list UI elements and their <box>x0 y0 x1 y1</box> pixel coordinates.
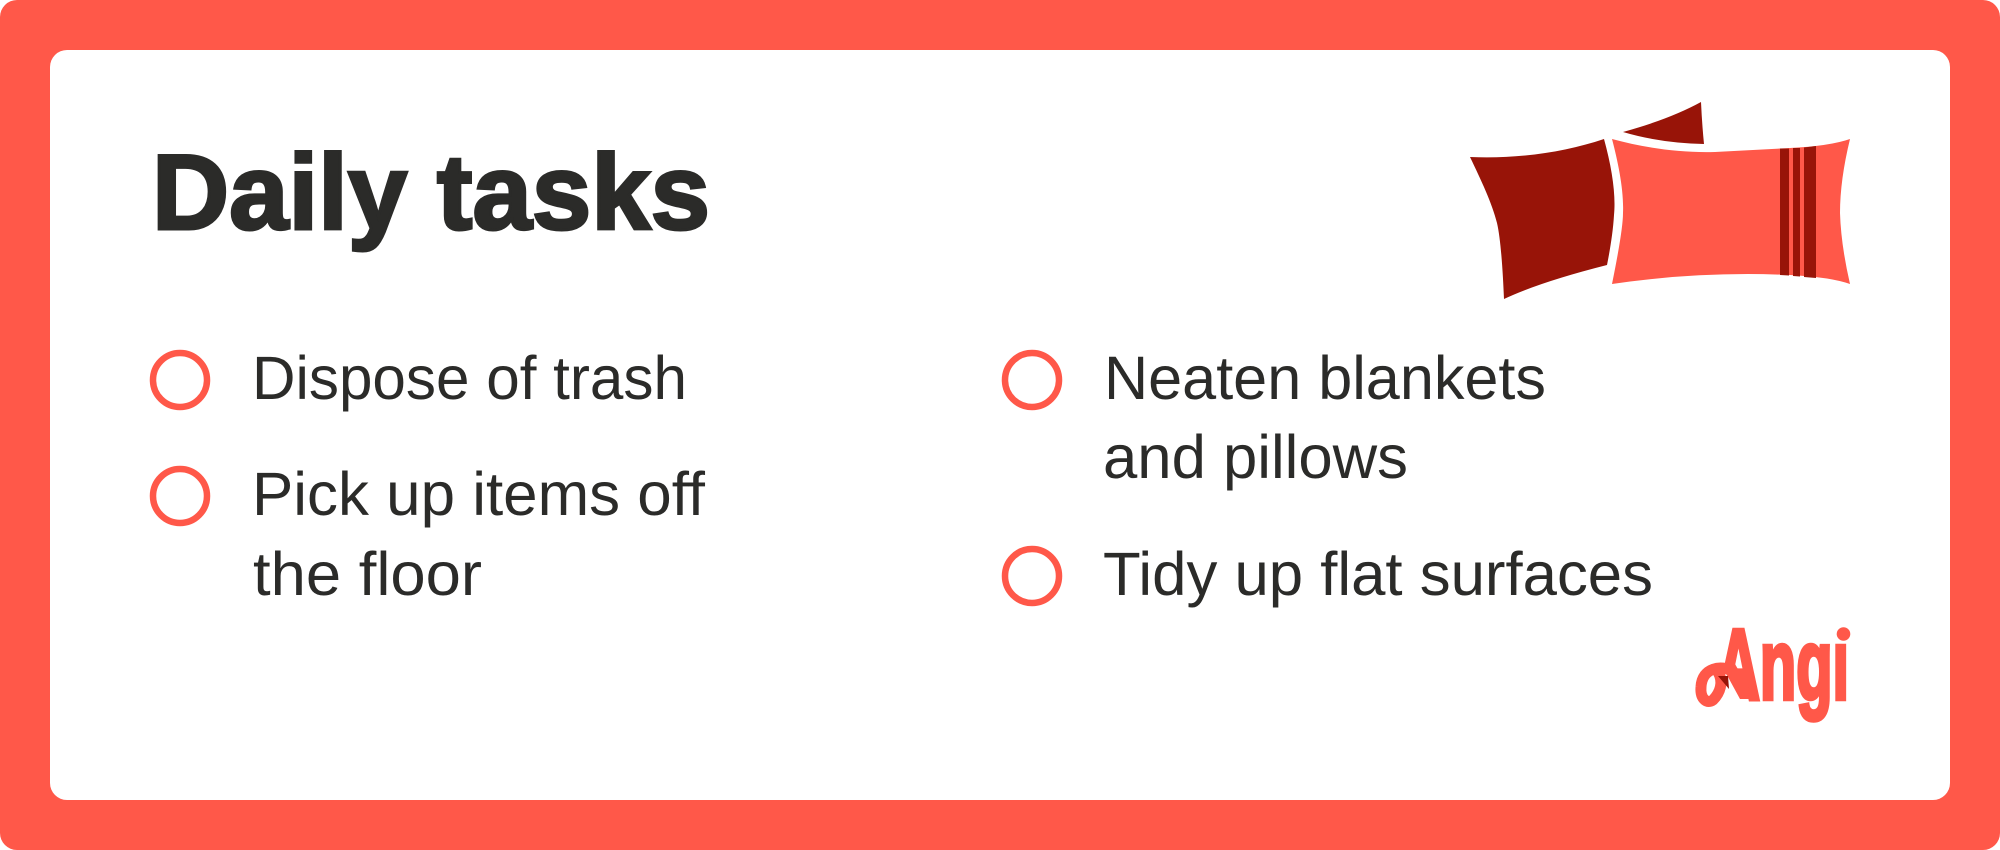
task: neaten blankets and pillows: and pillows <box>1103 423 1408 491</box>
front striped pillow <box>1612 139 1850 284</box>
back pillow corner <box>1623 102 1704 144</box>
icon: pillows <box>1470 102 1850 299</box>
left pillow <box>1470 139 1615 299</box>
task: dispose of trash: Dispose of trash <box>252 344 687 412</box>
logo: Angi: Angi <box>1717 609 1849 721</box>
task: pick up items off the floor: Pick up items off <box>252 460 706 528</box>
task: tidy up flat surfaces: Tidy up flat surfaces <box>1103 540 1653 608</box>
task: neaten blankets and pillows <box>1005 344 1546 491</box>
logo: Angi <box>1701 609 1854 721</box>
task: pick up items off the floor <box>153 460 706 608</box>
task: neaten blankets and pillows: Neaten blankets <box>1104 344 1546 412</box>
pillow stripes <box>1780 146 1816 278</box>
logo swash shadow <box>1718 676 1729 689</box>
logo i dot <box>1837 627 1850 641</box>
logo swash loop <box>1701 668 1732 701</box>
task: pick up items off the floor: the floor <box>253 540 482 608</box>
logo i dot mask <box>1832 620 1854 643</box>
logo ribbon to right leg <box>1720 664 1755 699</box>
logo mask under the A <box>1708 674 1741 706</box>
title: Daily tasks <box>152 132 710 252</box>
